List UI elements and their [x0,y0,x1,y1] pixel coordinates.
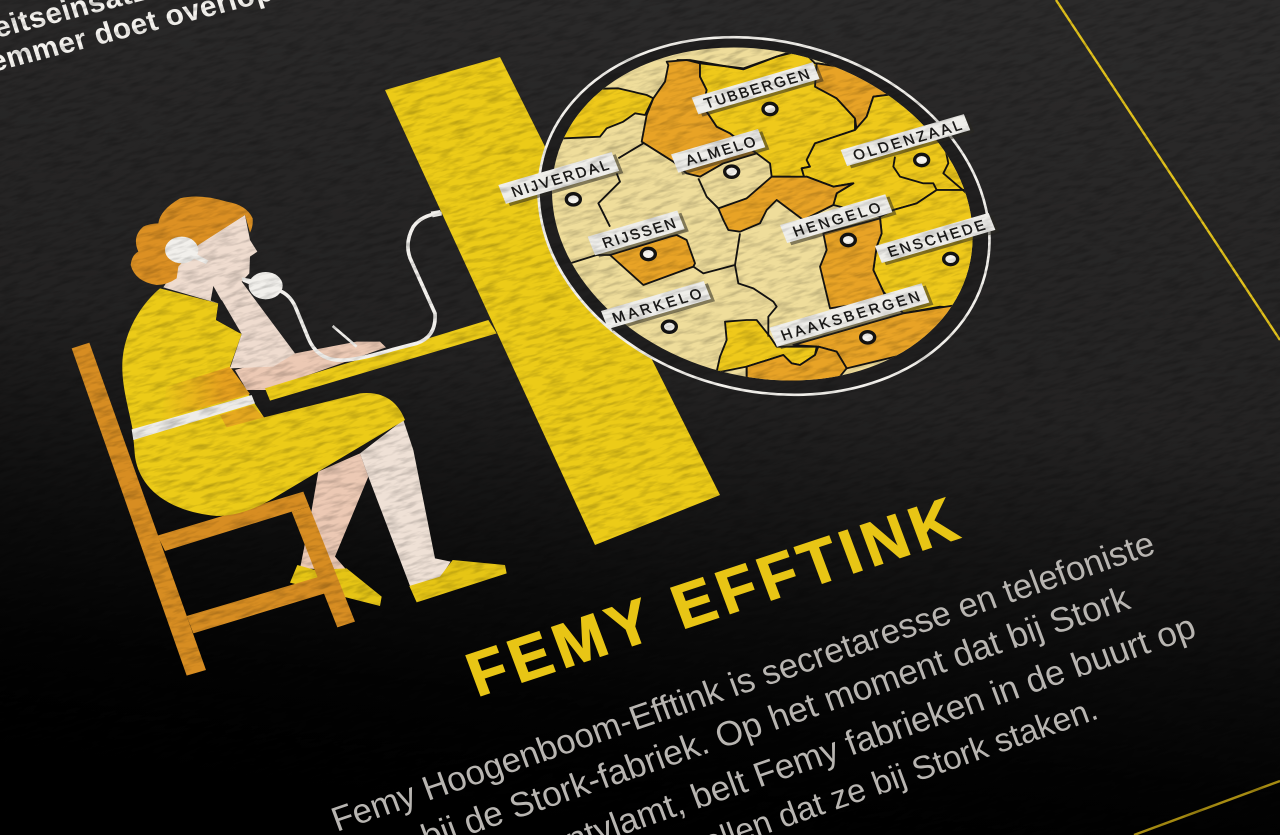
county map [552,48,973,380]
label: Tubbergen: TUBBERGEN [702,67,812,112]
label: Almelo: ALMELO [684,134,758,169]
label: Hengelo: HENGELO [791,200,883,240]
label: Rijssen: RIJSSEN [600,216,678,252]
label: Oldenzaal: OLDENZAAL [851,118,964,164]
title: FEMY EFFTINK [458,486,967,710]
map medallion [498,36,996,396]
tall yellow bar [385,57,720,545]
front leg [360,420,451,586]
rear leg [300,453,368,570]
front shoe [409,560,507,602]
shadow behind the arm [211,286,240,333]
head and neck [163,215,257,303]
label: Haaksbergen: HAAKSBERGEN [779,289,922,344]
label: Markelo [601,280,715,332]
label: Almelo [671,128,769,176]
yellow border line bottom right [1134,781,1280,835]
medallion ring [498,0,1030,444]
label: Nijverdal: NIJVERDAL [509,158,611,201]
illustration: telephonist at desk [72,196,507,676]
belt [132,395,255,440]
pen [333,326,357,347]
label: Tubbergen [692,61,824,118]
map pins [566,103,958,343]
yellow border line top right [1056,0,1280,340]
desk [265,320,497,401]
place labels [498,61,999,350]
label: Enschede: ENSCHEDE [886,218,988,261]
phone cord [282,213,440,360]
label: Oldenzaal [841,113,974,169]
earpiece [165,237,208,264]
label: Nijverdal [498,151,623,207]
label: Markelo: MARKELO [610,286,704,327]
dress [122,288,405,516]
label: Hengelo [780,193,897,246]
mouthpiece [242,272,283,299]
chair [72,343,355,676]
plug [431,210,442,217]
rear shoe [290,565,382,606]
label: Enschede [875,212,999,266]
hair [131,196,253,285]
dress shadow [160,367,250,420]
desk-side forearm [235,342,386,390]
raised arm [215,282,295,368]
body text: Femy Hoogenboom-Efftink is secretaresse en telefoniste [326,525,1160,835]
label: Rijssen [588,210,689,258]
